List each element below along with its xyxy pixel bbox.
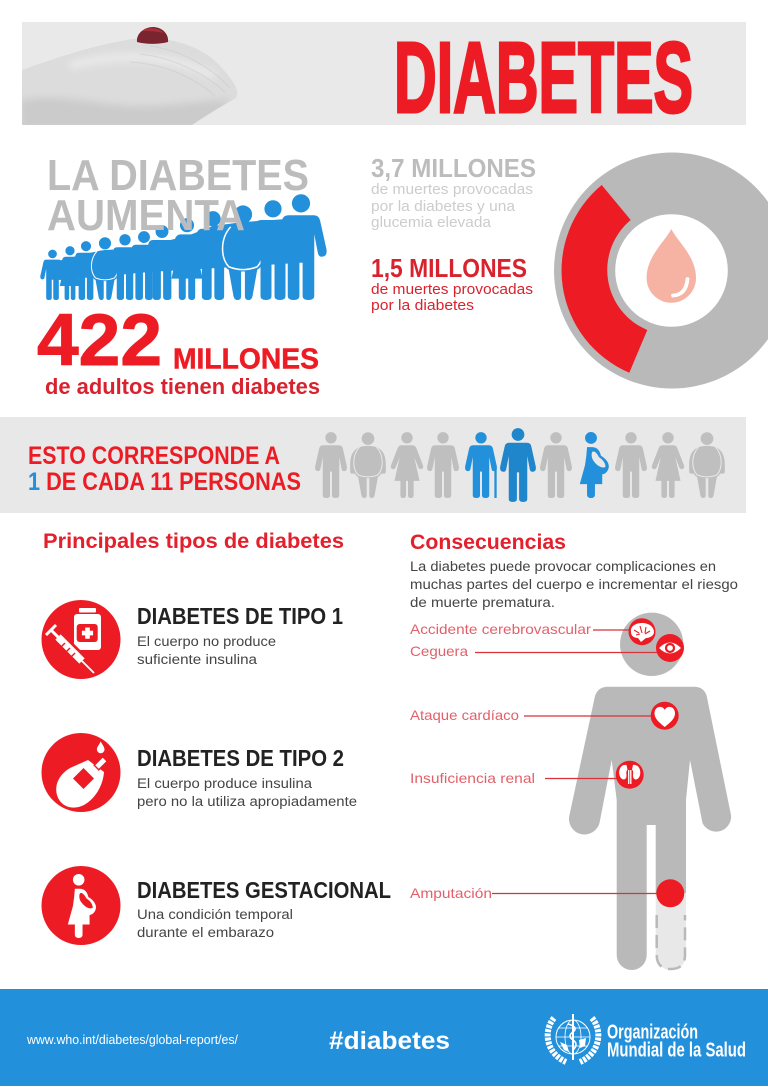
stat: 422 millones [37, 300, 320, 399]
text: tipo 1: DIABETES DE TIPO 1 [137, 603, 343, 629]
text: gestacional: Una condición temporal [137, 907, 293, 922]
heading: la diabetes aumenta [47, 151, 309, 240]
stat: 1,5 millones: 1,5 MILLONES [371, 253, 527, 283]
stat: 3,7 millones: 3,7 MILLONES [371, 153, 536, 183]
band: 1 in 11 people [0, 417, 746, 513]
text: consecuencias intro: muchas partes del cuerpo e incrementar el riesgo [410, 577, 738, 592]
icon: glucose meter [42, 733, 120, 812]
text: esto corresponde a [28, 442, 301, 496]
stat: 1,5 millones [371, 253, 533, 314]
icon: eye [656, 634, 684, 662]
heading: la diabetes aumenta: LA DIABETES [47, 151, 309, 200]
heading: principales tipos: Principales tipos de diabetes [43, 529, 344, 553]
callout: ceguera: Ceguera [410, 643, 468, 659]
stat: 422 millones: de adultos tienen diabetes [45, 374, 320, 399]
text: tipo 2 [137, 745, 357, 809]
icon: brain [628, 618, 656, 645]
text: esto corresponde a: ESTO CORRESPONDE A [28, 442, 280, 470]
text: gestacional [137, 877, 391, 940]
callout: amputacion: Amputación [410, 885, 492, 901]
footer [0, 989, 768, 1086]
text: tipo 2: El cuerpo produce insulina [137, 776, 313, 791]
callout: ataque cardiaco [410, 702, 679, 730]
text: consecuencias intro: La diabetes puede provocar complicaciones en [410, 559, 716, 574]
logo: WHO emblem [548, 1014, 598, 1062]
callout: ceguera [410, 634, 684, 662]
text: tipo 1 [137, 603, 343, 667]
callout: ataque cardiaco: Ataque cardíaco [410, 707, 519, 723]
text: gestacional: durante el embarazo [137, 925, 274, 940]
footer url: www.who.int/diabetes/global-report/es/ [26, 1033, 239, 1047]
icon: pregnant woman [42, 866, 120, 945]
icon: heart [651, 702, 679, 730]
icon: kidneys [616, 761, 644, 789]
callout: accidente cerebrovascular: Accidente cerebrovascular [410, 621, 591, 637]
stat: 3,7 millones: de muertes provocadas [371, 181, 533, 198]
logo: organization name [607, 1022, 746, 1062]
heading: la diabetes aumenta: AUMENTA [47, 191, 245, 240]
text: consecuencias intro [410, 559, 738, 610]
stat: 3,7 millones: glucemia elevada [371, 214, 492, 231]
text: consecuencias intro: de muerte prematura. [410, 595, 555, 610]
callout: accidente cerebrovascular [410, 618, 656, 645]
text: tipo 1: El cuerpo no produce [137, 634, 276, 649]
stat: 3,7 millones [371, 153, 536, 231]
icon: blood drop [647, 229, 696, 303]
text: tipo 2: pero no la utiliza apropiadamente [137, 794, 357, 809]
header band [20, 22, 746, 134]
donut chart [554, 152, 768, 388]
footer hashtag: #diabetes [329, 1027, 450, 1055]
stat: 422 millones: MILLONES [173, 344, 319, 376]
text: gestacional: DIABETES GESTACIONAL [137, 877, 391, 903]
people group: rising diabetes [40, 194, 327, 300]
text: tipo 2: DIABETES DE TIPO 2 [137, 745, 344, 771]
callout: insuficiencia renal: Insuficiencia renal [410, 770, 535, 786]
stat: 1,5 millones: por la diabetes [371, 297, 474, 314]
image: finger with blood drop [20, 27, 242, 130]
stat: 1,5 millones: de muertes provocadas [371, 281, 533, 298]
text: esto corresponde a: 1 DE CADA 11 PERSONAS [28, 468, 301, 496]
body figure [569, 613, 731, 970]
stat: 422 millones: 422 [37, 300, 162, 381]
icon: insulin bottle and syringe [42, 600, 120, 679]
callout: amputacion [410, 879, 684, 907]
logo: organization name: Organización [607, 1022, 698, 1044]
pictogram row [315, 428, 725, 502]
text: tipo 1: suficiente insulina [137, 652, 258, 667]
heading: consecuencias: Consecuencias [410, 530, 566, 554]
callout: insuficiencia renal [410, 761, 644, 789]
amputated leg [656, 893, 686, 970]
stat: 3,7 millones: por la diabetes y una [371, 198, 516, 215]
